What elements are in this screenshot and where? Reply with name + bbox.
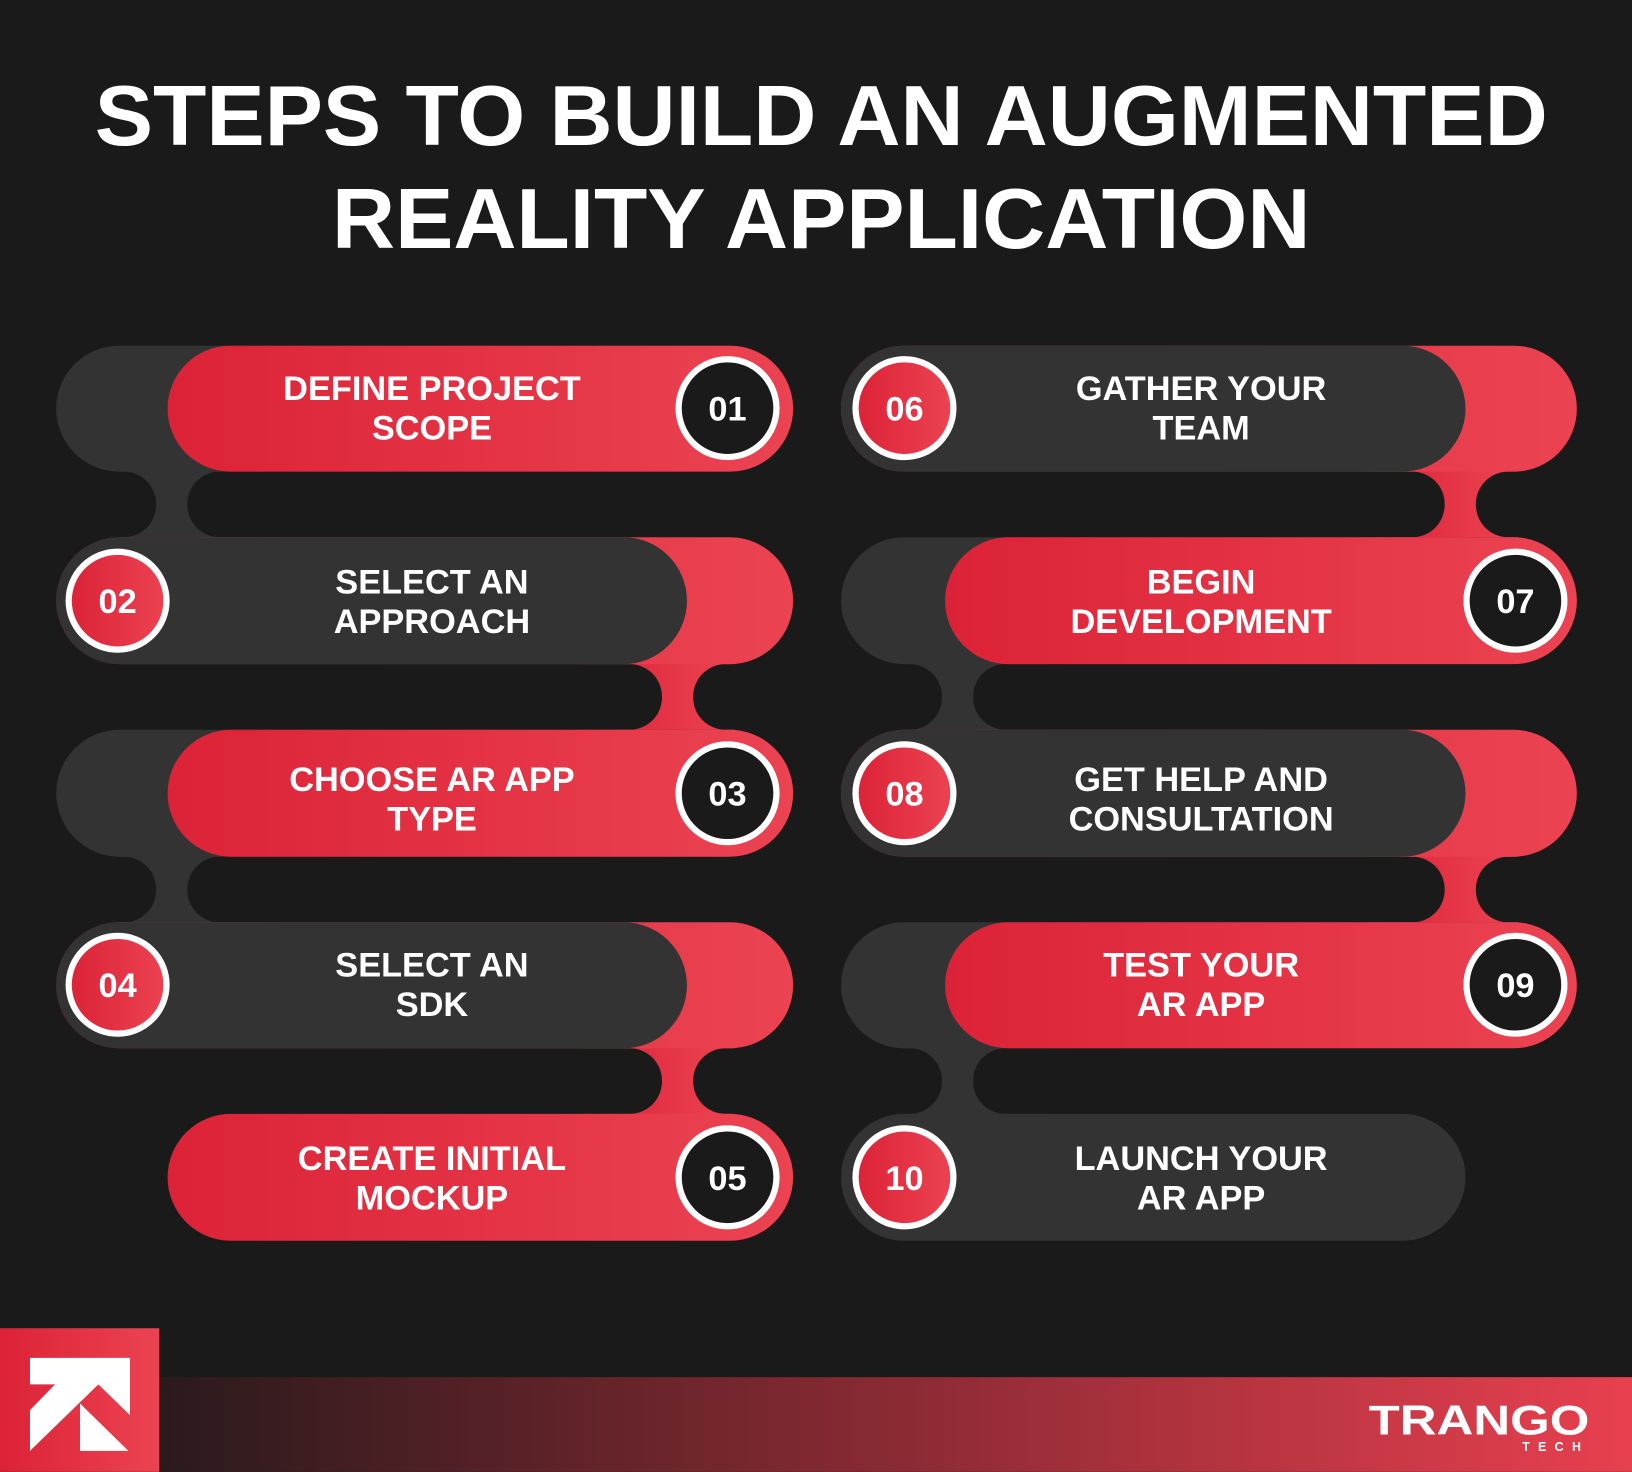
step 01 xyxy=(56,346,793,472)
step 08: 08 xyxy=(885,776,924,814)
logo square xyxy=(0,1328,159,1472)
title xyxy=(95,69,1548,267)
step 08 xyxy=(841,730,1577,857)
title: REALITY APPLICATION xyxy=(332,172,1310,267)
step 07: BEGIN xyxy=(1147,563,1255,601)
step 08: GET HELP AND xyxy=(1074,761,1328,799)
step 08: CONSULTATION xyxy=(1069,801,1334,839)
step 06: 06 xyxy=(885,391,924,429)
step 09 xyxy=(841,922,1577,1048)
step 02: SELECT AN xyxy=(335,563,529,601)
step 04: SDK xyxy=(396,986,468,1024)
step 05: 05 xyxy=(708,1160,747,1198)
step 06: TEAM xyxy=(1152,409,1250,447)
step 02: 02 xyxy=(99,583,137,621)
gaps xyxy=(0,472,156,537)
step 10: 10 xyxy=(885,1160,924,1198)
step 02 xyxy=(56,537,793,664)
step 03 xyxy=(56,730,793,857)
brand logo text xyxy=(1369,1396,1589,1454)
step 10: AR APP xyxy=(1137,1180,1265,1218)
footer band xyxy=(159,1377,1632,1472)
step 03: CHOOSE AR APP xyxy=(289,761,575,799)
step 03: TYPE xyxy=(387,801,477,839)
icon: arrow xyxy=(30,1358,130,1451)
title: STEPS TO BUILD AN AUGMENTED xyxy=(95,69,1548,164)
step 10: LAUNCH YOUR xyxy=(1075,1140,1328,1178)
step 05 xyxy=(168,1114,793,1241)
step 03: 03 xyxy=(708,776,747,814)
step 02: APPROACH xyxy=(334,603,530,641)
step 09: TEST YOUR xyxy=(1103,946,1299,984)
step 04: SELECT AN xyxy=(335,946,529,984)
brand logo text: TRANGO xyxy=(1369,1396,1589,1443)
step 05: MOCKUP xyxy=(356,1180,508,1218)
step 09: 09 xyxy=(1496,967,1535,1005)
step 07: 07 xyxy=(1496,583,1535,621)
step 07 xyxy=(841,537,1577,664)
brand logo text: TECH xyxy=(1522,1440,1589,1454)
step 06: GATHER YOUR xyxy=(1076,370,1327,408)
step 05: CREATE INITIAL xyxy=(298,1140,566,1178)
step 09: AR APP xyxy=(1137,986,1265,1024)
step 01: DEFINE PROJECT xyxy=(283,370,581,408)
step 10 xyxy=(841,1114,1465,1241)
step 01: SCOPE xyxy=(372,409,492,447)
step 01: 01 xyxy=(708,391,747,429)
connectors xyxy=(0,408,1632,1177)
step 04 xyxy=(56,922,793,1048)
step 07: DEVELOPMENT xyxy=(1070,603,1332,641)
step 04: 04 xyxy=(99,967,137,1005)
step 06 xyxy=(841,346,1577,472)
